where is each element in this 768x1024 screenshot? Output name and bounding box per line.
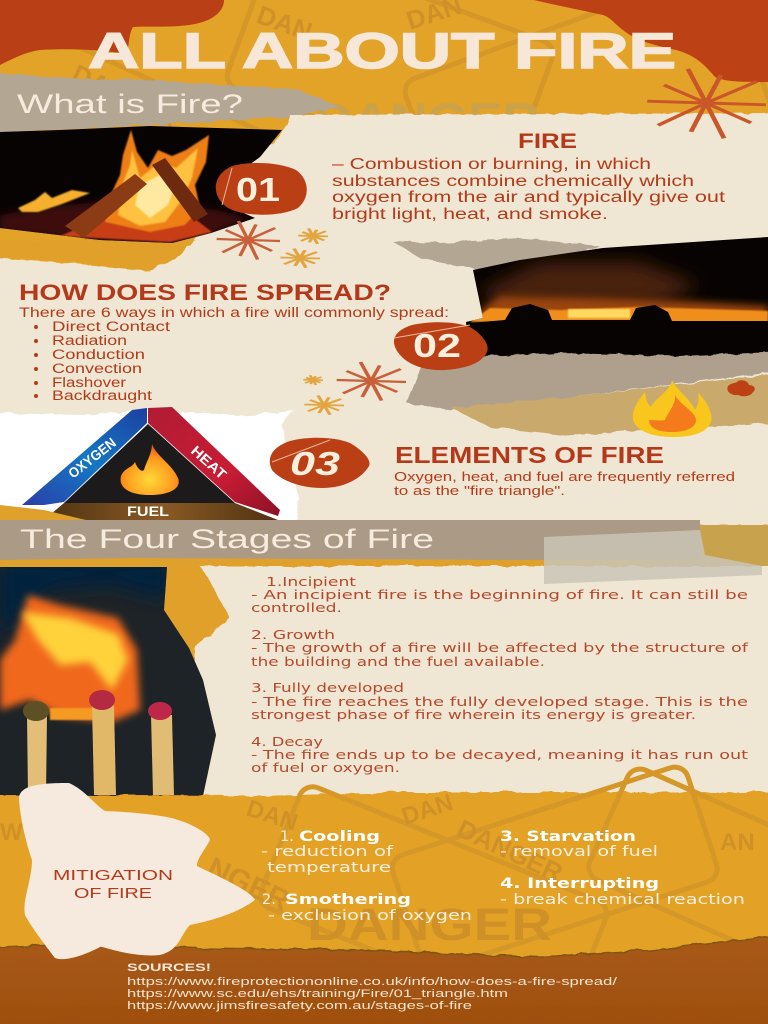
background danger signs: bottom: DANGER [452,813,567,888]
background danger signs: bottom: DAN [243,795,301,837]
torn kraft paper [407,352,768,410]
spread list: Flashover [52,375,127,390]
blob: top left red [0,0,224,65]
methods: starvation: - removal of fuel [500,844,658,860]
icon: fire emoji [633,380,711,437]
panel: cream upper [0,113,768,525]
torn orange scrap beside matches [160,566,230,650]
methods: starvation: 3. Starvation [500,829,636,845]
spread list [34,319,170,403]
stage 4: 4. Decay [251,734,323,749]
icon: flower [727,380,755,396]
orange scrap bottom left of triangle [0,505,90,521]
fire definition: – Combustion or burning, in which [332,156,651,173]
stage 2: 2. Growth [251,627,335,642]
elements description [394,470,735,498]
methods: cooling: 1. [280,829,294,845]
blob: mitigation of fire: OF FIRE [74,885,152,902]
stage 2 [251,627,749,669]
heading: elements of fire: ELEMENTS OF FIRE [395,442,664,468]
fuel label: FUEL [127,503,170,519]
methods: smothering: - exclusion of oxygen [268,908,472,924]
background danger signs: top [0,0,768,291]
heat label: HEAT [188,442,230,483]
photo: burning matches [0,560,220,800]
star: orange tiny [303,375,323,385]
stage 3 [251,680,748,722]
methods: smothering [262,892,472,924]
chart: fire triangle [0,407,299,522]
spread list: Backdraught [52,388,152,403]
elements description: to as the "fire triangle". [394,484,565,498]
methods: interrupting [500,876,745,908]
fire definition [332,156,726,223]
star: orange lower [280,248,320,268]
fire definition: oxygen from the air and typically give out [332,189,726,206]
star: orange small top [298,228,328,244]
stage 1: - An incipient fire is the beginning of fire. It can still be [251,587,748,602]
panel: what is fire band: What is Fire? [17,89,243,119]
torn gray paper above photo 2 [392,238,600,270]
sources: https://www.fireprotectiononline.co.uk/info/how-does-a-fire-spread/ [127,976,618,988]
stage 1 [251,574,748,615]
methods: cooling: temperature [267,860,391,876]
oxygen label: OXYGEN [65,434,119,481]
spread list: Radiation [52,333,127,348]
fire definition: bright light, heat, and smoke. [332,206,608,223]
background danger signs: bottom: AN [720,829,755,856]
blob: mitigation of fire [19,783,255,959]
stage 3: strongest phase of fire wherein its energy is greater. [251,707,696,722]
background danger signs: bottom: DAN [399,789,456,831]
heading: how does fire spread: HOW DOES FIRE SPREAD? [19,280,391,305]
spread list: Convection [52,361,142,376]
title: ALL ABOUT FIRE [88,23,676,79]
methods: cooling: Cooling [299,829,380,845]
sources [127,962,618,1012]
photo: campfire [0,126,282,243]
white photo background [0,410,299,522]
sources: https://www.jimsfiresafety.com.au/stages-of-fire [127,1000,472,1012]
badge: 02 [394,322,488,370]
stage 1: controlled. [251,600,342,615]
sources: https://www.sc.edu/ehs/training/Fire/01_triangle.htm [127,988,508,1000]
photo: burning building at night [466,237,768,357]
stage 1: 1.Incipient [266,574,356,589]
gray tape [544,530,762,584]
orange strip below section band [0,555,768,568]
sources: SOURCES! [127,962,211,974]
methods: starvation [500,829,658,860]
blob: mitigation of fire: MITIGATION [53,867,173,884]
panel: mitigation orange [0,792,768,960]
blob: top right red [534,0,768,82]
background danger signs: top: DANGER [315,94,540,145]
fuel side [44,503,278,520]
icon: triangle flame [121,444,179,495]
panel: four stages band [0,520,768,584]
star: red centre [337,362,406,401]
badge: 02: 02 [413,327,461,364]
stage 4 [251,734,748,775]
background danger signs: top: DAN [253,0,316,47]
badge: 01: 01 [236,171,280,208]
fire heading: FIRE [518,130,577,153]
panel: what is fire band [0,73,340,133]
star: top right [647,69,766,138]
torn tan paper [451,374,768,435]
star: orange bottom [304,396,344,415]
centre [64,424,235,503]
oxygen side [22,408,147,505]
spread intro: There are 6 ways in which a fire will commonly spread: [19,305,449,320]
panel: stages cream [195,566,768,800]
stage 3: 3. Fully developed [251,680,404,695]
star: red near 01 [217,221,280,260]
methods: smothering: 2. [262,892,276,908]
background danger signs: bottom: DANGER [307,899,552,950]
badge: 03: 03 [290,445,340,482]
badge: 03 [270,438,370,488]
heat side [148,407,280,516]
background danger signs: bottom: NGER [202,851,295,918]
methods: interrupting: - break chemical reaction [500,892,745,908]
background danger signs: bottom [0,763,768,1024]
badge: 01 [216,163,307,215]
elements description: Oxygen, heat, and fuel are frequently referred [394,470,735,484]
decorative orange strip below fire photo [0,240,195,271]
background danger signs: bottom: W [0,819,23,846]
stage 4: of fuel or oxygen. [251,760,400,775]
panel: sources brown [0,937,768,1024]
spread list: Direct Contact [52,319,170,334]
methods: cooling [261,829,394,876]
stage 4: - The fire ends up to be decayed, meaning it has run out [251,747,748,762]
panel: four stages band: The Four Stages of Fire [20,524,434,554]
stage 3: - The fire reaches the fully developed stage. This is the [251,694,748,709]
methods: cooling: - reduction of [261,844,394,860]
tan tape [640,525,768,566]
spread list: Conduction [52,347,145,362]
methods: smothering: Smothering [285,892,411,908]
stage 2: - The growth of a fire will be affected by the structure of [251,640,749,655]
fire definition: substances combine chemically which [332,173,694,190]
background danger signs: top: DANGER [67,58,182,133]
stage 2: the building and the fuel available. [251,654,545,669]
methods: interrupting: 4. Interrupting [500,876,659,892]
